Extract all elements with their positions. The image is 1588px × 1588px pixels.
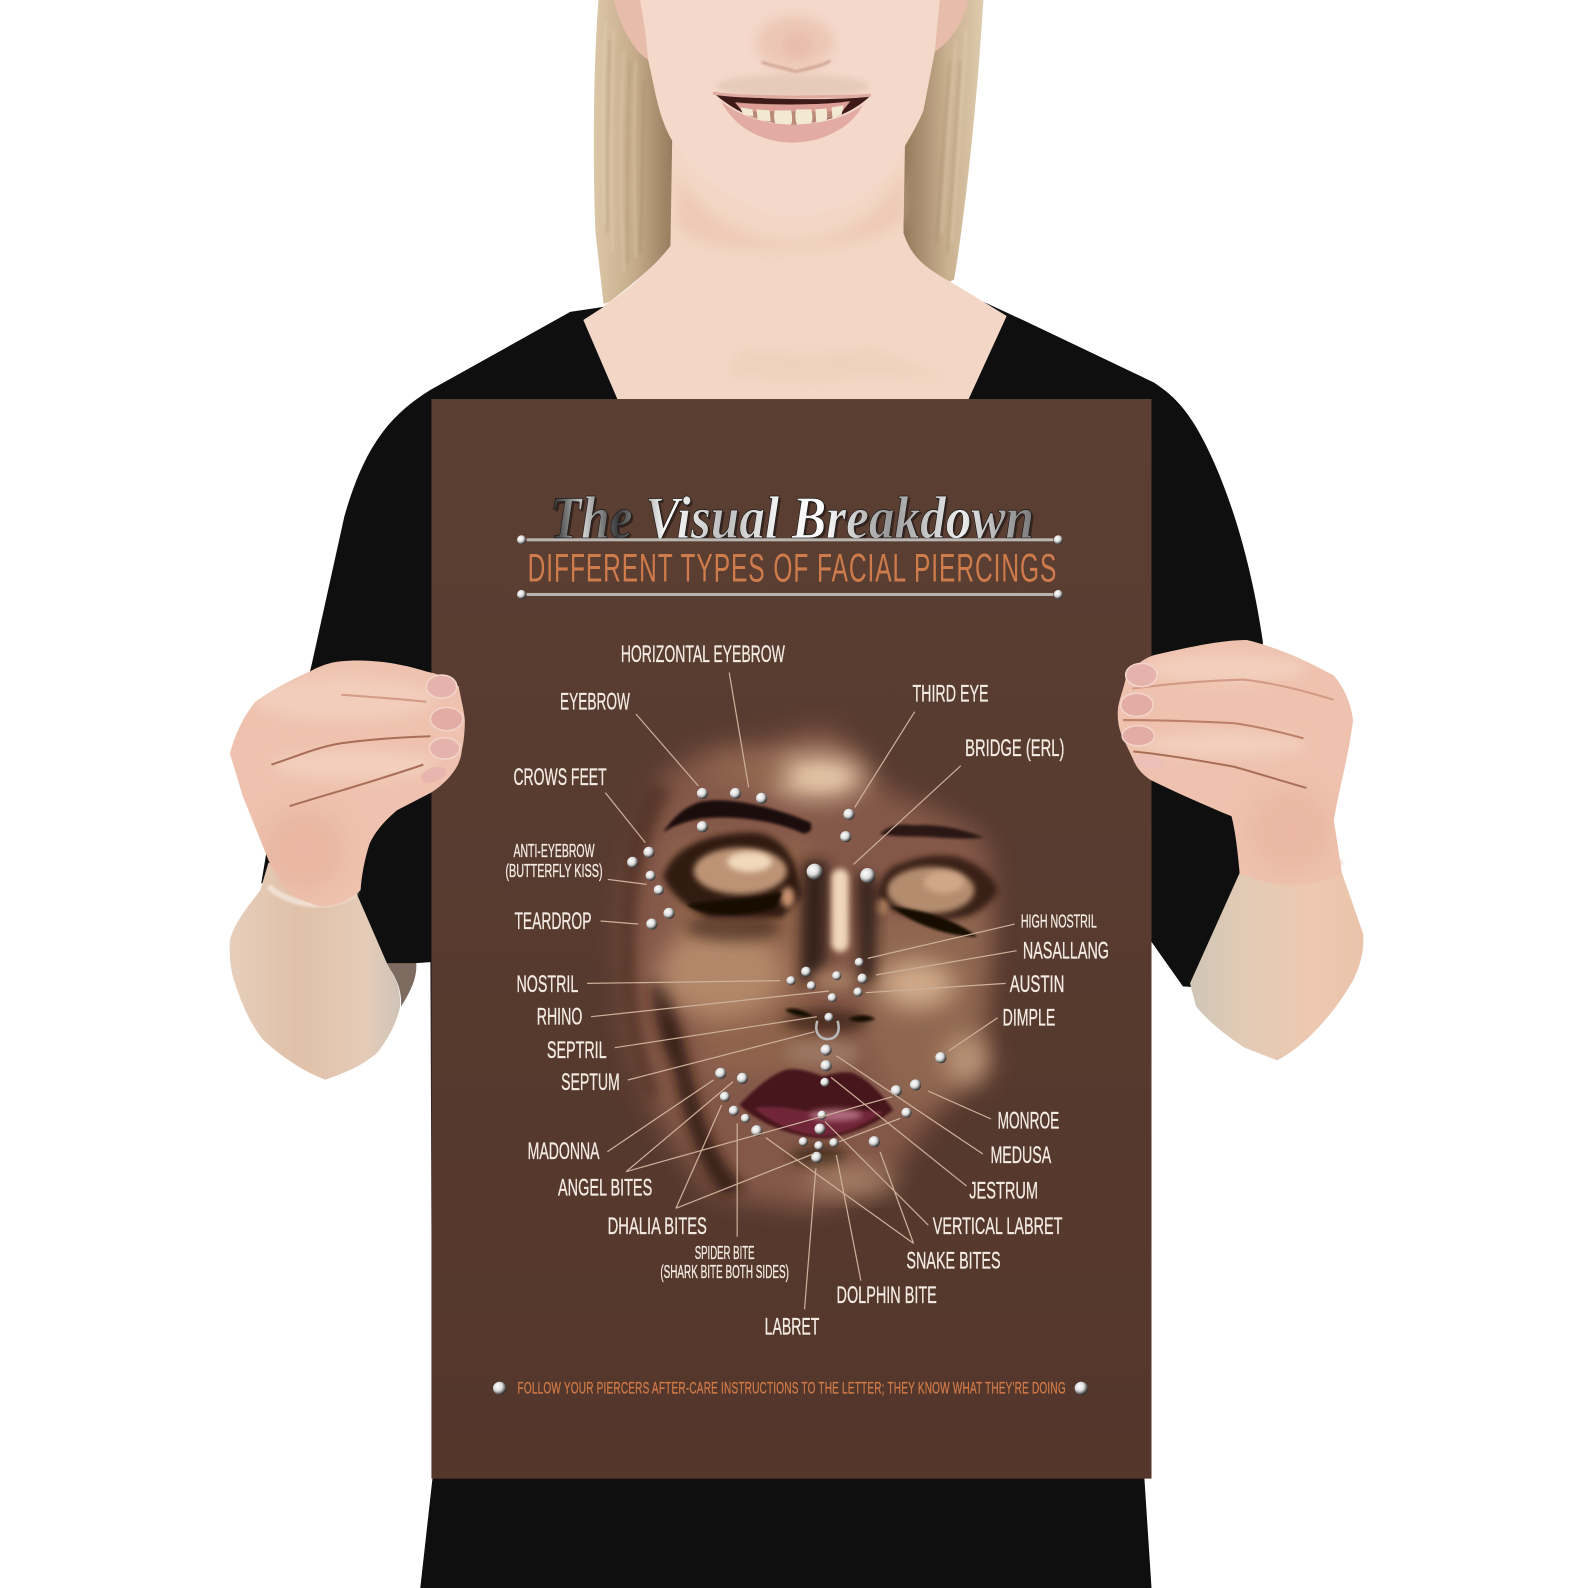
connector: lower right bite <box>839 1118 900 1142</box>
photo: left hand holding poster <box>230 660 465 906</box>
label: dimple <box>949 1004 1055 1051</box>
label: teardrop: TEARDROP <box>514 908 591 935</box>
ear right <box>935 0 968 52</box>
label: anti-eyebrow: (BUTTERFLY KISS) <box>505 861 603 881</box>
poster title: The Visual Breakdown: The Visual Breakdown <box>552 487 1036 554</box>
footer note: FOLLOW YOUR PIERCERS AFTER-CARE INSTRUCTIONS TO THE LETTER; THEY KNOW WHAT THEY'RE DOING <box>518 1379 1066 1397</box>
label: madonna <box>528 1080 713 1165</box>
label: eyebrow: EYEBROW <box>560 688 630 715</box>
lips <box>739 1069 893 1138</box>
nose shading <box>800 861 828 987</box>
photo: black shirt <box>261 302 1263 1588</box>
left lashes <box>687 892 782 915</box>
label: eyebrow <box>560 688 698 786</box>
left cheek <box>658 926 784 1019</box>
photo: left forearm <box>230 861 416 1080</box>
label: dhalia bites <box>608 1105 815 1240</box>
label: spider bite <box>660 1123 789 1282</box>
label: high nostril <box>868 912 1097 958</box>
label: snake bites: SNAKE BITES <box>906 1247 1001 1274</box>
label: vertical labret <box>825 1122 1062 1240</box>
label: horizontal eyebrow <box>621 641 785 787</box>
upper lip skin <box>784 1039 861 1067</box>
label: nostril: NOSTRIL <box>517 971 578 998</box>
ear left <box>614 0 648 60</box>
eyebrows <box>663 800 811 833</box>
label: nasallang <box>876 938 1109 975</box>
nose <box>757 16 833 69</box>
label: dolphin bite <box>836 1155 937 1309</box>
illustration: painted face <box>620 730 998 1210</box>
label: anti-eyebrow: ANTI-EYEBROW <box>513 841 595 861</box>
piercing studs <box>627 788 946 1163</box>
label: madonna: MADONNA <box>528 1138 600 1165</box>
hair streak <box>620 785 673 1099</box>
label: septum: SEPTUM <box>561 1069 620 1096</box>
right lashes <box>891 906 977 937</box>
label: labret: LABRET <box>765 1313 819 1340</box>
label: jestrum: JESTRUM <box>969 1178 1038 1205</box>
smile shadow <box>716 74 870 98</box>
photo: right hand holding poster <box>1118 640 1353 885</box>
label: nasallang: NASALLANG <box>1023 938 1109 965</box>
label: monroe <box>928 1091 1059 1135</box>
label: spider bite: SPIDER BITE <box>695 1243 755 1263</box>
label: bridge: BRIDGE (ERL) <box>965 735 1064 762</box>
label: septril: SEPTRIL <box>547 1037 607 1064</box>
label: vertical labret: VERTICAL LABRET <box>933 1213 1062 1240</box>
face base <box>620 730 994 1210</box>
label: crows feet: CROWS FEET <box>513 764 607 791</box>
label: medusa <box>836 1056 1052 1169</box>
label: horizontal eyebrow: HORIZONTAL EYEBROW <box>621 641 785 668</box>
photo: model's face <box>614 0 968 217</box>
label: dimple: DIMPLE <box>1003 1004 1055 1031</box>
right cheek highlights <box>878 960 955 1009</box>
label: jestrum <box>831 1077 1038 1205</box>
label: septum <box>561 1032 815 1096</box>
nose highlight <box>831 869 849 952</box>
label: third eye: THIRD EYE <box>912 680 988 707</box>
label: austin: AUSTIN <box>1010 971 1064 998</box>
label: medusa: MEDUSA <box>990 1142 1052 1169</box>
label: anti-eyebrow <box>505 841 647 884</box>
label: austin <box>866 971 1064 998</box>
subtitle: DIFFERENT TYPES OF FACIAL PIERCINGS <box>528 545 1056 590</box>
septum ring <box>816 1021 839 1039</box>
photo: right forearm <box>1190 851 1363 1060</box>
label: rhino <box>537 991 829 1030</box>
mouth <box>715 94 870 125</box>
label: third eye <box>855 680 988 807</box>
under nose shadow <box>783 1009 868 1033</box>
right eye socket and lid <box>877 856 998 920</box>
label: high nostril: HIGH NOSTRIL <box>1021 912 1097 932</box>
label: snake bites <box>766 1138 1001 1274</box>
title rule: upper <box>517 535 1063 544</box>
poster title: The Visual Breakdown: The Visual Breakdown <box>550 485 1034 552</box>
label: spider bite: (SHARK BITE BOTH SIDES) <box>660 1262 789 1282</box>
label: monroe: MONROE <box>998 1108 1059 1135</box>
label: bridge <box>853 735 1064 864</box>
title rule: lower <box>517 590 1063 599</box>
poster panel <box>431 399 1152 1479</box>
label: dolphin bite: DOLPHIN BITE <box>837 1282 937 1309</box>
nostrils <box>785 1009 813 1017</box>
forehead highlight <box>768 755 865 799</box>
label: dhalia bites: DHALIA BITES <box>608 1213 707 1240</box>
label: rhino: RHINO <box>537 1003 582 1030</box>
chin highlight <box>805 1169 896 1193</box>
label: angel bites: ANGEL BITES <box>558 1175 652 1202</box>
photo: model's neck and chest <box>583 122 1007 400</box>
left eye socket and lid <box>663 832 802 918</box>
label: septril <box>547 1017 817 1064</box>
under lip shadow <box>790 1146 847 1167</box>
label: labret <box>765 1168 819 1340</box>
label: angel bites <box>558 1082 892 1202</box>
photo: blonde hair, left and right <box>594 0 983 304</box>
label: crows feet <box>513 764 645 843</box>
